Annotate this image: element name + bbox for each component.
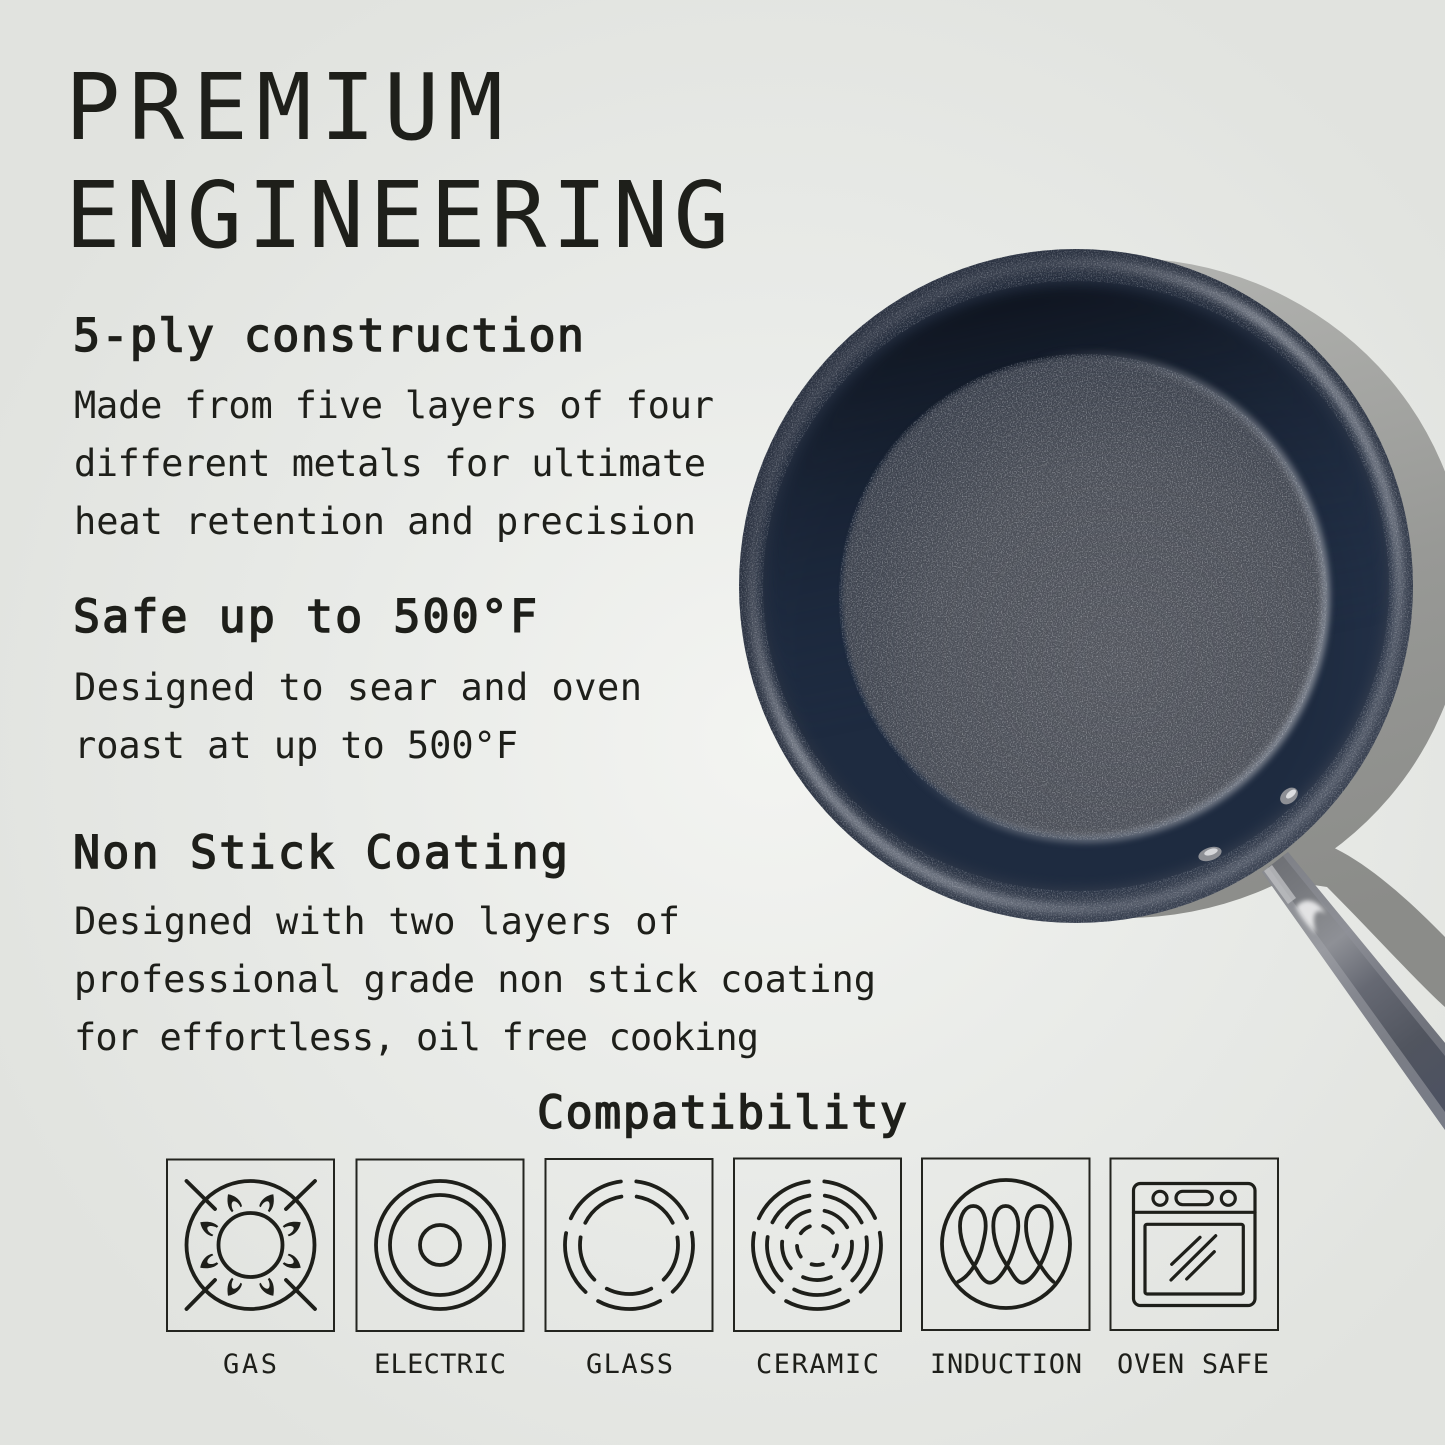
label: ELECTRIC xyxy=(374,1349,506,1380)
icon: ceramic segmented rings xyxy=(746,1174,888,1316)
description: professional grade non stick coating xyxy=(74,958,876,1001)
pan rim xyxy=(739,249,1413,923)
description: different metals for ultimate xyxy=(74,442,706,485)
compatibility: induction xyxy=(922,1158,1090,1380)
pan cooking surface xyxy=(842,357,1324,837)
feature: 5-ply construction xyxy=(73,309,714,543)
icon: electric rings xyxy=(376,1181,504,1309)
heading: Non Stick Coating xyxy=(73,826,568,879)
description: for effortless, oil free cooking xyxy=(74,1016,759,1059)
label: CERAMIC xyxy=(756,1349,879,1380)
icon: glass segmented rings xyxy=(558,1174,700,1316)
frying pan xyxy=(739,249,1414,924)
label: GLASS xyxy=(586,1349,673,1380)
compatibility: oven safe xyxy=(1110,1158,1278,1380)
description: roast at up to 500°F xyxy=(74,724,518,767)
speckled coating: floor xyxy=(839,354,1327,840)
heading: 5-ply construction xyxy=(73,309,584,362)
icon: gas burner xyxy=(186,1181,315,1309)
title xyxy=(65,54,729,269)
icon: induction coil xyxy=(942,1180,1070,1308)
label: OVEN SAFE xyxy=(1117,1349,1269,1380)
description xyxy=(74,900,876,1059)
compatibility: electric xyxy=(356,1160,524,1380)
title: PREMIUM xyxy=(65,54,503,161)
compatibility: glass xyxy=(546,1159,712,1380)
feature: safe up to 500F xyxy=(73,590,642,767)
label: GAS xyxy=(223,1349,277,1380)
description: heat retention and precision xyxy=(74,500,696,543)
description: Designed to sear and oven xyxy=(74,666,642,709)
feature: non stick coating xyxy=(73,826,876,1059)
compatibility: gas xyxy=(167,1160,334,1380)
description xyxy=(74,666,642,767)
rivet lower xyxy=(1197,844,1223,864)
pan inner wall xyxy=(764,282,1388,890)
description: Designed with two layers of xyxy=(74,900,680,943)
description: Made from five layers of four xyxy=(74,384,714,427)
label: INDUCTION xyxy=(930,1349,1082,1380)
icon: oven xyxy=(1134,1184,1255,1306)
heading: Safe up to 500°F xyxy=(73,590,537,643)
rim highlight xyxy=(753,263,1399,909)
pan cast shadow xyxy=(783,258,1445,1007)
compatibility heading: Compatibility xyxy=(537,1086,907,1139)
pan handle xyxy=(1262,852,1445,1130)
surface edge highlight xyxy=(840,355,1326,839)
speckled coating: rim xyxy=(739,249,1414,924)
title: ENGINEERING xyxy=(65,162,729,269)
description xyxy=(74,384,714,543)
rivet upper xyxy=(1277,784,1301,808)
compatibility: ceramic xyxy=(734,1158,901,1380)
